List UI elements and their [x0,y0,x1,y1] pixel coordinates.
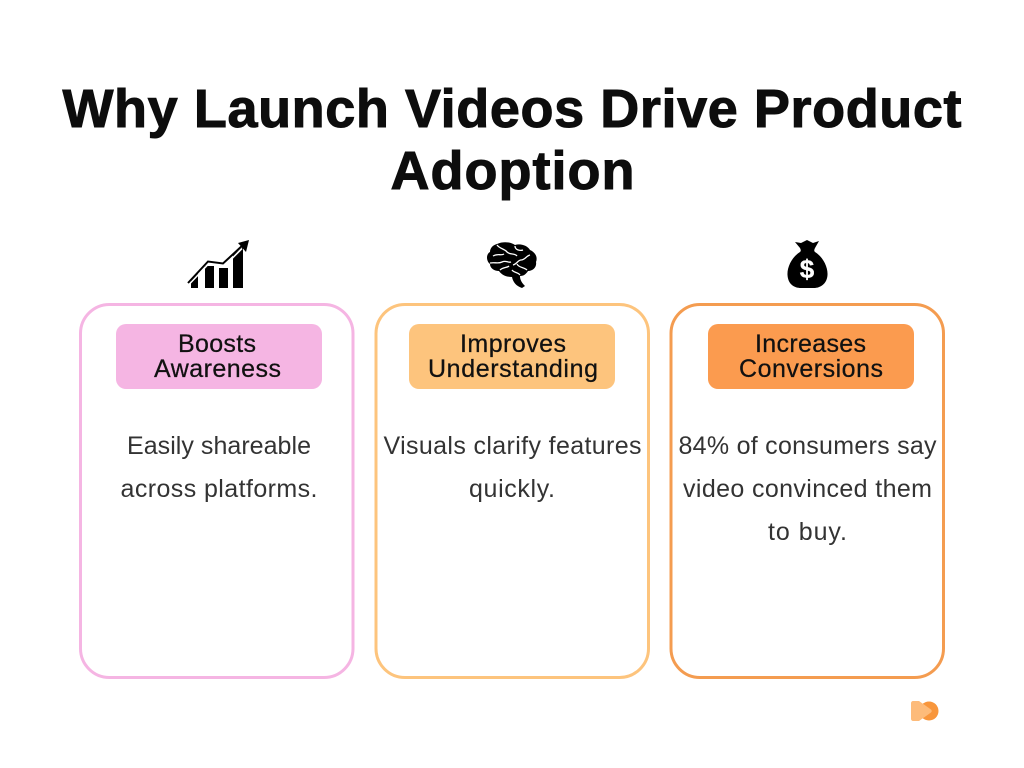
pill heading: Boosts [178,330,256,358]
pill heading [116,324,322,389]
pill heading: Understanding [428,355,598,383]
pill heading [708,324,914,389]
panel: increases conversions [671,304,944,678]
panel: boosts awareness [80,304,353,678]
body text: Easily shareable [127,432,311,460]
pill heading: Increases [755,330,866,358]
icon: money bag: $ [800,254,815,284]
icon: logo [911,701,938,721]
pill heading: Awareness [154,355,281,383]
icon: growth chart [188,240,249,288]
card outline [80,304,353,678]
body text [384,432,642,503]
body text: Visuals clarify features [384,432,642,460]
body text: 84% of consumers say [678,432,937,460]
panel: improves understanding [376,304,648,678]
pill heading: Conversions [739,355,883,383]
body text [678,432,937,546]
title: Adoption [390,141,634,201]
body text: to buy. [768,518,847,546]
title [62,79,962,201]
icon: money bag [787,240,828,288]
body text: quickly. [469,475,555,503]
body text [120,432,318,503]
pill heading [409,324,615,389]
title: Why Launch Videos Drive Product [62,79,962,139]
card outline [376,304,648,678]
pill heading: Improves [460,330,566,358]
card outline [671,304,944,678]
body text: across platforms. [120,475,318,503]
icon: brain [487,242,537,288]
body text: video convinced them [683,475,932,503]
